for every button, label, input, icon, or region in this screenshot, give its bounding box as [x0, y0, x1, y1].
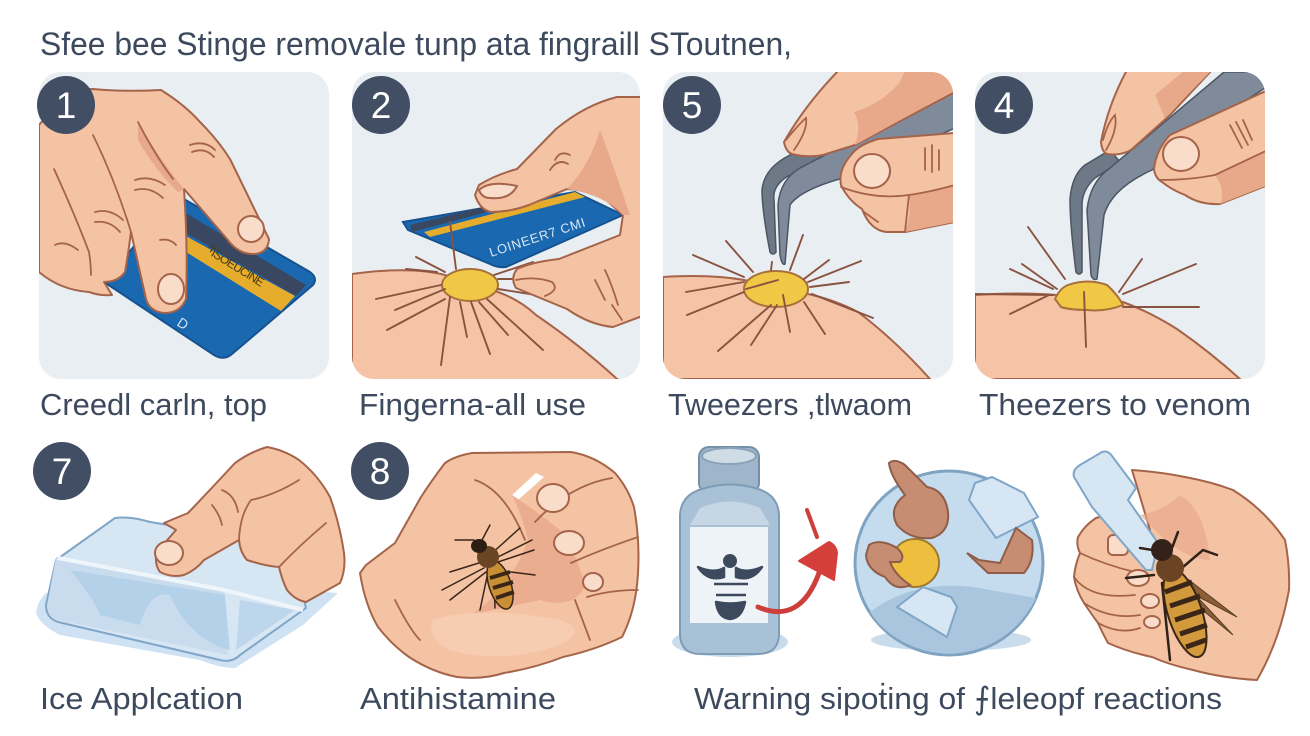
icon: bee logo on label [698, 554, 762, 619]
caption 7: Ice Applcation [40, 681, 243, 716]
title: Sfee bee Stinge removale tunp ata fingraill SToutnen, [40, 26, 792, 62]
panel: step 2 fingernail [352, 72, 645, 390]
skin mound [663, 276, 930, 379]
caption 4: Theezers to venom [979, 387, 1251, 422]
icon: credit card: ՊSOEUCINE [203, 243, 267, 290]
caption 3: Tweezers ,tlwaom [668, 387, 912, 422]
step number 2: 2 [371, 85, 391, 126]
step number 4: 4 [994, 85, 1014, 126]
caption 2: Fingerna-all use [359, 387, 586, 422]
panel: step 4 tweezers [975, 70, 1268, 379]
step number 8 [351, 442, 409, 500]
hand [156, 447, 344, 602]
vial [1074, 452, 1158, 570]
step number 7: 7 [52, 451, 72, 492]
icon: credit card: D [174, 314, 191, 333]
icon: credit card [104, 195, 315, 358]
icon: hand [1101, 70, 1268, 204]
sting [975, 227, 1199, 347]
icon: bee [442, 525, 535, 612]
step number 1 [37, 76, 95, 134]
step number 1: 1 [56, 85, 76, 126]
icon: tweezers [1070, 72, 1265, 280]
step number 2 [352, 76, 410, 134]
icon: hand holding vial and bee [1074, 452, 1289, 680]
panel: step 3 tweezers [663, 70, 955, 379]
arrow: red curved [758, 510, 837, 612]
step number 7 [33, 442, 91, 500]
caption 8: Antihistamine [360, 681, 556, 716]
caption: warning signs: Warning sipoṫing of ⨍leleopf reactions [694, 681, 1222, 716]
sting [686, 235, 873, 351]
step number 3: 5 [682, 85, 702, 126]
sting [376, 222, 548, 365]
icon: globe of symptoms [855, 461, 1043, 655]
skin mound [352, 269, 620, 379]
icon: credit card: LOINEER7 CMI [487, 215, 587, 260]
caption 1: Creedl carln, top [40, 387, 267, 422]
step number 8: 8 [370, 451, 390, 492]
icon: medicine bottle [672, 447, 788, 657]
illustration: ice application [36, 447, 344, 668]
icon: hand [475, 97, 645, 327]
icon: tweezers [762, 88, 955, 264]
step number 3 [663, 76, 721, 134]
icon: hand [39, 89, 269, 313]
icon: bee [1126, 532, 1237, 662]
panel: step 1 credit card [39, 72, 329, 379]
skin mound [975, 294, 1240, 379]
illustration: antihistamine hand with bee [360, 452, 638, 678]
step number 4 [975, 76, 1033, 134]
icon: hand [784, 70, 955, 232]
icon: credit card [403, 192, 623, 267]
